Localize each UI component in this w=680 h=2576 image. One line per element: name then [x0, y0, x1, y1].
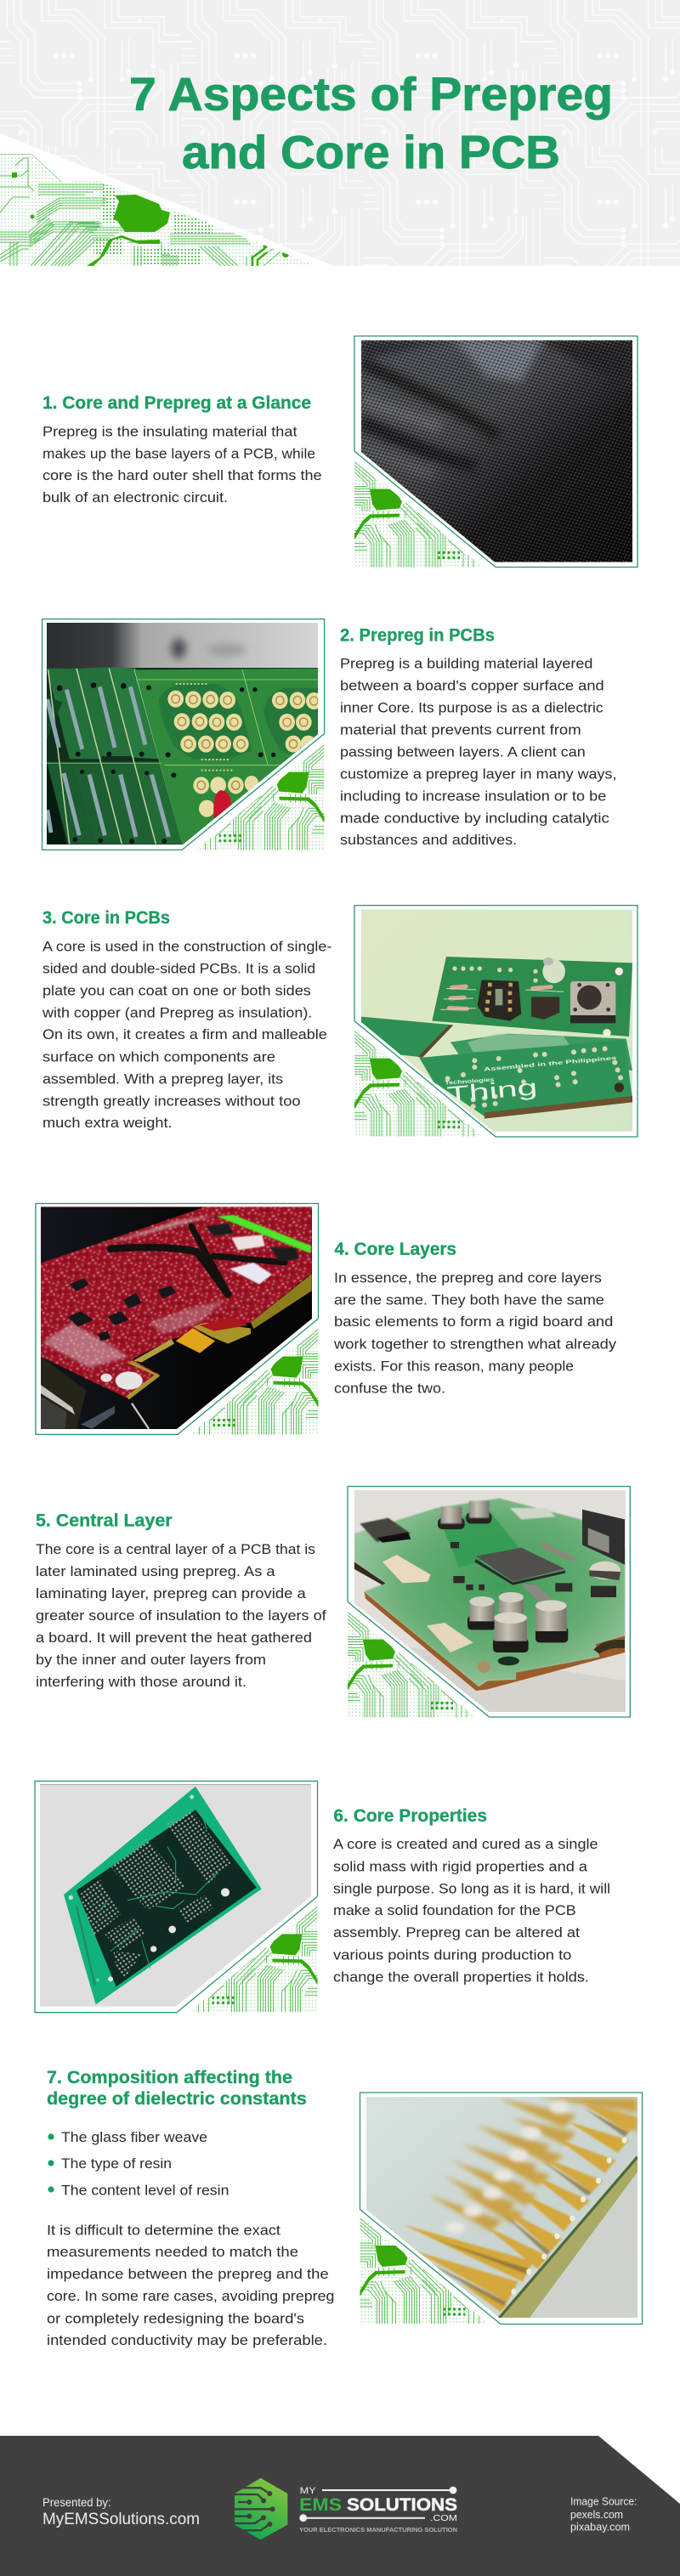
wordmark: EMS — [299, 2495, 342, 2515]
photo: red graphics card board — [41, 1206, 313, 1431]
text block 2: substances and additives. — [340, 832, 517, 848]
white corner with green circuit art — [0, 133, 334, 266]
text block 7 — [47, 2223, 334, 2348]
photo frame — [360, 2093, 643, 2325]
photo: stacked green boards with gold pads — [47, 623, 322, 847]
text block 7: intended conductivity may be preferable. — [47, 2333, 327, 2348]
header banner — [0, 0, 680, 266]
heading 2: 2. Prepreg in PCBs — [340, 625, 495, 646]
text block 2: customize a prepreg layer in many ways, — [340, 766, 617, 782]
text block 3: plate you can coat on one or both sides — [42, 982, 311, 998]
text block 4: In essence, the prepreg and core layers — [334, 1269, 602, 1285]
heading 7: 7. Composition affecting the — [47, 2068, 292, 2087]
text block 2: including to increase insulation or to be — [340, 788, 606, 804]
text block 7: core. In some rare cases, avoiding prepreg — [47, 2289, 334, 2304]
text block 3: with copper (and Prepreg as insulation). — [42, 1004, 312, 1020]
push button — [570, 981, 615, 1022]
text block 6: solid mass with rigid properties and a — [333, 1859, 588, 1874]
text block 6: A core is created and cured as a single — [333, 1837, 598, 1852]
text block 6 — [333, 1837, 610, 1985]
circuit corner — [354, 459, 483, 568]
text block 3: A core is used in the construction of single- — [42, 939, 332, 955]
wordmark — [299, 2486, 457, 2534]
wordmark: YOUR ELECTRONICS MANUFACTURING SOLUTION — [299, 2526, 457, 2534]
photo: gold chip pins — [364, 2095, 639, 2322]
text block 1: core is the hard outer shell that forms the — [42, 467, 322, 483]
text block 6: assembly. Prepreg can be altered at — [333, 1925, 580, 1940]
bullet list: The glass fiber weave — [61, 2130, 207, 2145]
heading 6: 6. Core Properties — [333, 1806, 487, 1826]
photo: dark bare board on grey — [38, 1782, 313, 2009]
text block 2: inner Core. Its purpose is as a dielectric — [340, 699, 604, 715]
bullet list: The type of resin — [61, 2156, 172, 2172]
text block 6: single purpose. So long as it is hard, it will — [333, 1881, 610, 1896]
photo frame — [354, 336, 638, 568]
text block 3: much extra weight. — [42, 1115, 173, 1131]
image source: pexels.com — [570, 2509, 623, 2521]
panel: 3. core in pcbs — [42, 906, 638, 1137]
bullet list: The content level of resin — [61, 2183, 229, 2198]
text block 5 — [36, 1541, 326, 1690]
text block 2: Prepreg is a building material layered — [340, 656, 592, 672]
text block 7: measurements needed to match the — [47, 2245, 298, 2260]
LED — [542, 959, 565, 983]
photo frame — [348, 1487, 630, 1717]
text block 5: interfering with those around it. — [36, 1674, 246, 1690]
circuit corner — [348, 1609, 476, 1718]
text block 1 — [42, 423, 322, 506]
photo: circuit board with capacitors — [353, 1489, 627, 1715]
heading 7: degree of dielectric constants — [47, 2089, 307, 2109]
text block 4: are the same. They both have the same — [334, 1291, 604, 1308]
text block 2: made conductive by including catalytic — [340, 810, 609, 826]
bullet list — [48, 2130, 229, 2198]
text block 4: work together to strengthen what already — [333, 1336, 617, 1353]
text block 4: exists. For this reason, many people — [334, 1358, 574, 1374]
photo: small green assembled boards — [360, 907, 635, 1134]
heading 5: 5. Central Layer — [36, 1511, 173, 1530]
image source: pixabay.com — [570, 2522, 630, 2534]
text block 3: strength greatly increases without too — [42, 1093, 301, 1109]
photo frame — [354, 906, 638, 1137]
title: 7 Aspects of Prepreg — [129, 68, 613, 121]
title: and Core in PCB — [182, 126, 560, 178]
text block 2: material that prevents current from — [340, 721, 581, 737]
text block 5: greater source of insulation to the layers of — [36, 1607, 326, 1624]
text block 5: later laminated using prepreg. As a — [36, 1563, 275, 1579]
text block 2: between a board's copper surface and — [340, 678, 604, 693]
text block 3 — [42, 939, 332, 1131]
panel: 4. core layers — [36, 1203, 617, 1434]
text block 3: sided and double-sided PCBs. It is a solid — [42, 960, 315, 977]
text block 5: by the inner and outer layers from — [36, 1652, 266, 1668]
circuit corner — [189, 1904, 318, 2012]
presented by — [42, 2496, 200, 2528]
wordmark: SOLUTIONS — [347, 2495, 457, 2515]
switch — [531, 997, 559, 1020]
heading 3: 3. Core in PCBs — [42, 908, 170, 928]
text block 4: basic elements to form a rigid board and — [334, 1313, 613, 1330]
photo: small green assembled boards: Thing — [446, 1074, 538, 1107]
text block 2: passing between layers. A client can — [340, 744, 586, 760]
text block 6: make a solid foundation for the PCB — [333, 1903, 576, 1918]
icon: hexagon circuit — [235, 2478, 287, 2539]
text block 7: or completely redesigning the board's — [47, 2311, 304, 2326]
pads — [445, 966, 623, 1109]
photo frame — [42, 619, 325, 850]
circuit corner — [196, 743, 325, 850]
text block 4: confuse the two. — [334, 1380, 445, 1396]
circuit corner — [354, 1029, 483, 1137]
text block 3: assembled. With a prepreg layer, its — [42, 1071, 283, 1087]
text block 1: bulk of an electronic circuit. — [42, 489, 228, 506]
wordmark: .COM — [430, 2513, 457, 2523]
panel: 6. core properties — [35, 1781, 610, 2013]
panel: 7. composition — [47, 2068, 643, 2348]
text block 5: a board. It will prevent the heat gathered — [36, 1630, 312, 1646]
text block 7: It is difficult to determine the exact — [47, 2223, 280, 2238]
panel: 1. core and prepreg at a glance — [42, 336, 638, 568]
text block 2 — [340, 656, 617, 848]
image source — [570, 2495, 638, 2534]
panel: 5. central layer — [36, 1487, 630, 1718]
socket — [478, 980, 521, 1021]
text block 7: impedance between the prepreg and the — [47, 2267, 329, 2282]
photo: carbon fibre weave — [360, 338, 635, 563]
image source: Image Source: — [570, 2495, 638, 2507]
capacitors — [438, 1501, 568, 1652]
text block 3: surface on which components are — [42, 1048, 275, 1065]
resistors — [449, 986, 551, 1008]
panel: 2. prepreg in pcbs — [42, 619, 617, 850]
logo — [235, 2478, 457, 2539]
footer — [0, 2436, 680, 2576]
text block 1: makes up the base layers of a PCB, while — [42, 445, 315, 461]
photo: small green assembled boards: Assembled in the Philippines — [484, 1055, 617, 1073]
text block 6: change the overall properties it holds. — [333, 1969, 589, 1985]
title — [129, 68, 613, 178]
text block 3: On its own, it creates a firm and malleable — [42, 1026, 327, 1042]
heading 7 — [47, 2068, 307, 2109]
text block 5: The core is a central layer of a PCB that is — [36, 1541, 315, 1557]
text block 4 — [333, 1269, 617, 1396]
wordmark: MY — [300, 2486, 316, 2496]
circuit corner — [190, 1327, 318, 1434]
photo frame — [36, 1203, 318, 1434]
text block 5: laminating layer, prepreg can provide a — [36, 1585, 306, 1602]
photo: small green assembled boards: Technologies — [445, 1077, 495, 1087]
heading 1: 1. Core and Prepreg at a Glance — [42, 393, 311, 413]
circuit corner — [360, 2216, 488, 2324]
presented by: Presented by: — [42, 2496, 111, 2509]
heading 4: 4. Core Layers — [334, 1240, 456, 1259]
presented by: MyEMSSolutions.com — [42, 2511, 200, 2528]
text block 1: Prepreg is the insulating material that — [42, 423, 298, 439]
photo frame — [35, 1781, 318, 2013]
text block 6: various points during production to — [333, 1947, 571, 1963]
